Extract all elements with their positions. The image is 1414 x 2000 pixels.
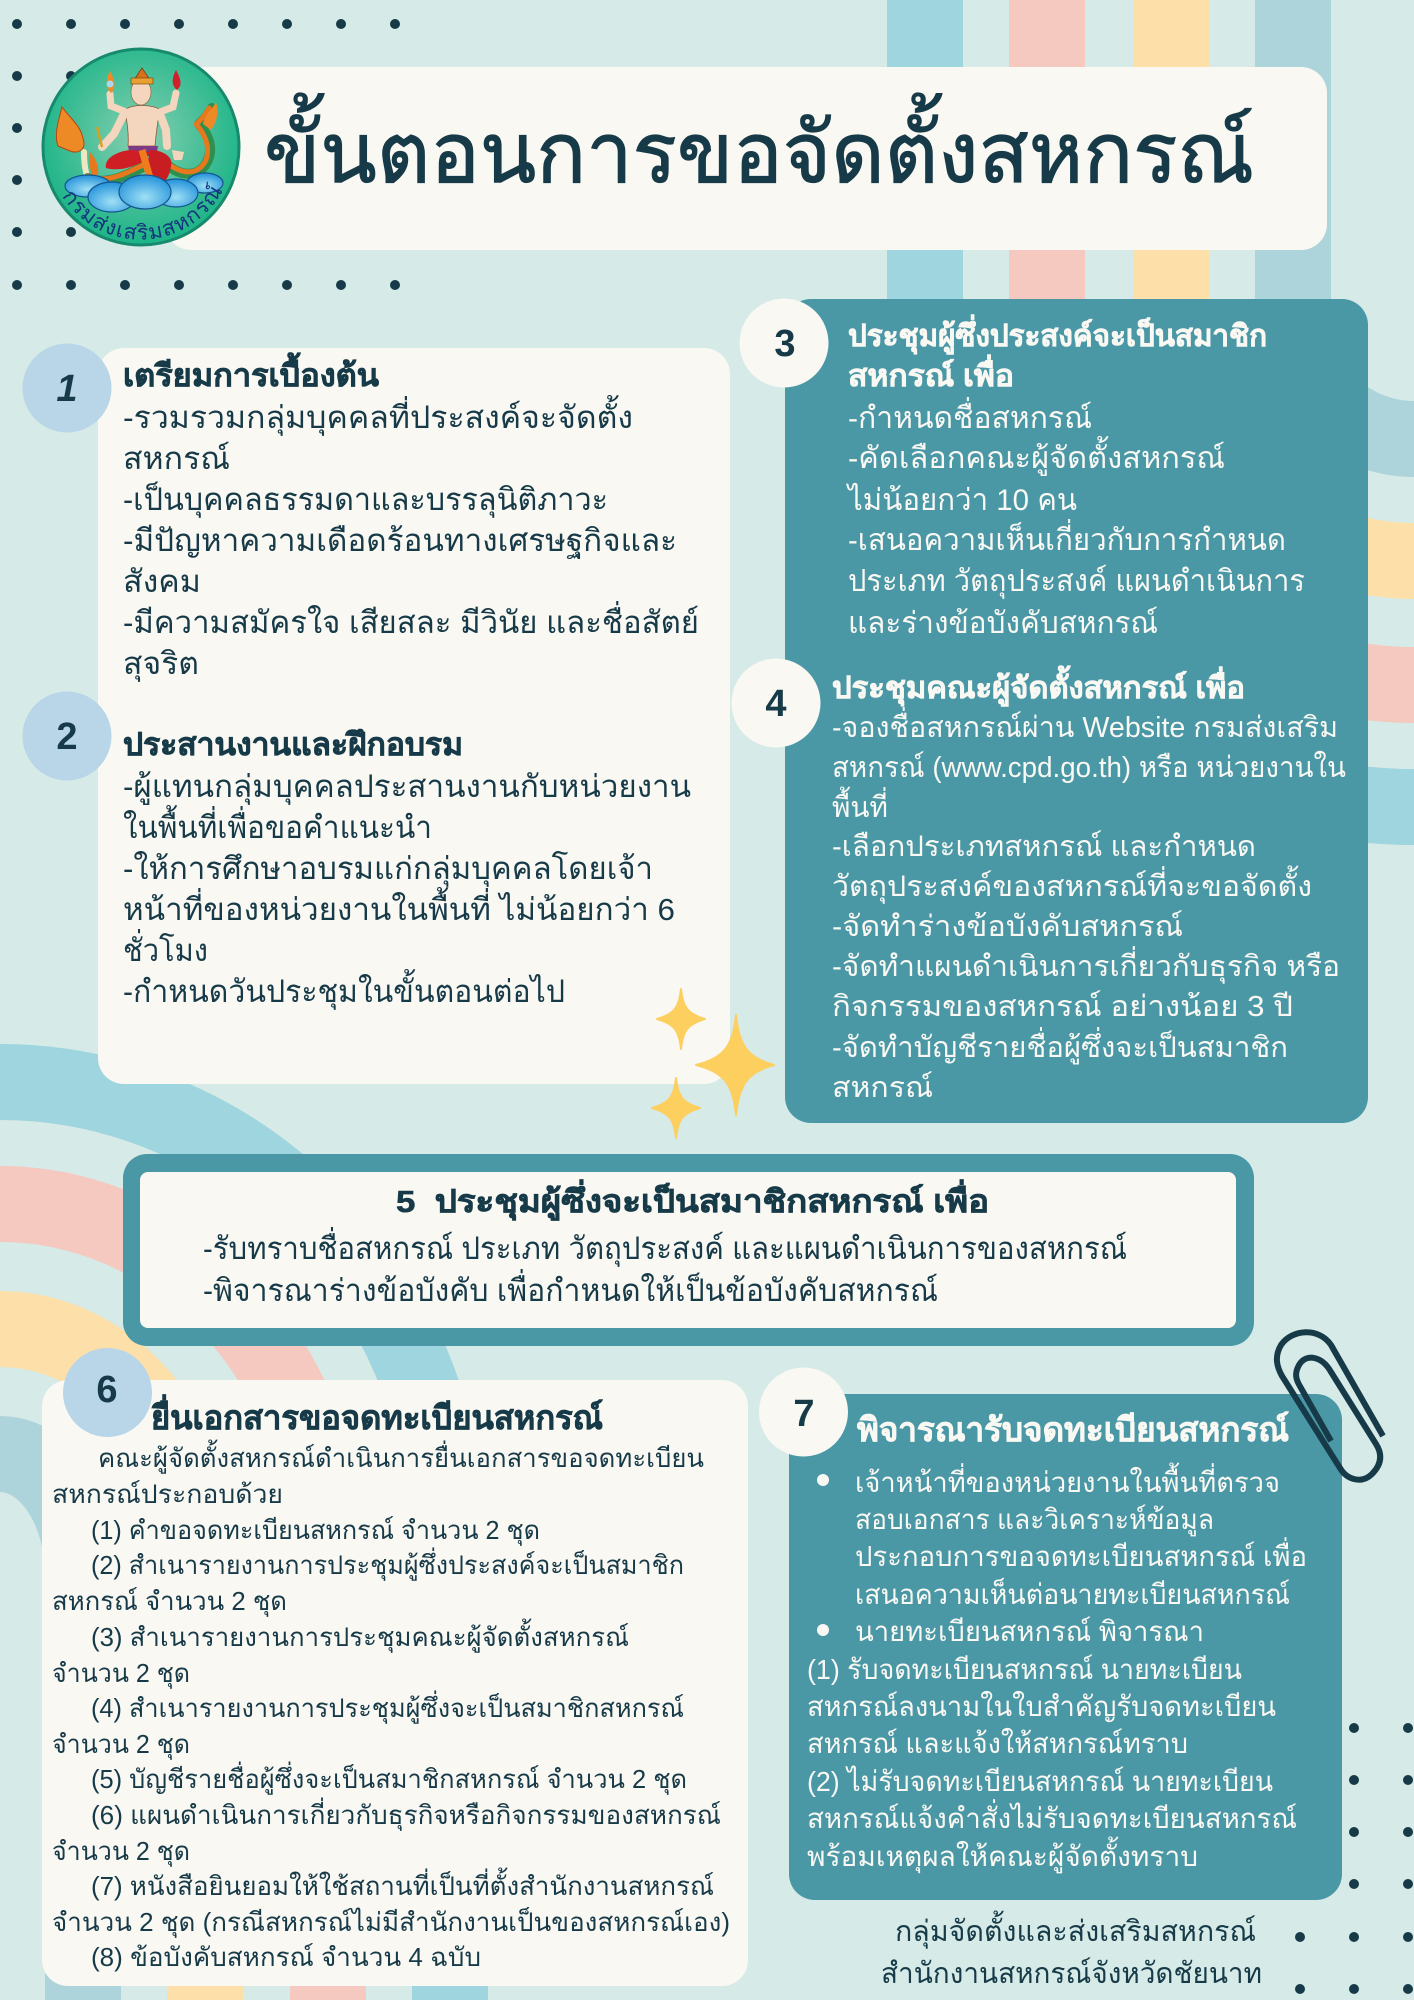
panel: steps 1 and 2 — [22, 344, 730, 1084]
naga serpent — [84, 108, 212, 184]
step 6 body: (6) แผนดำเนินการเกี่ยวกับธุรกิจหรือกิจกรรมของสหกรณ์ — [91, 1797, 721, 1831]
step 2 body: -กำหนดวันประชุมในขั้นตอนต่อไป — [123, 969, 565, 1011]
step 3 heading — [848, 314, 1267, 393]
step 4 heading: ประชุมคณะผู้จัดตั้งสหกรณ์ เพื่อ — [832, 665, 1245, 707]
step 3 body: -คัดเลือกคณะผู้จัดตั้งสหกรณ์ — [848, 436, 1225, 476]
step 2 badge: 2 — [56, 716, 78, 758]
step 2 body: -ให้การศึกษาอบรมแก่กลุ่มบุคคลโดยเจ้า — [123, 851, 653, 888]
seal text: กรมส่งเสริมสหกรณ์ — [63, 181, 222, 240]
icon: paperclip — [1277, 1332, 1383, 1480]
step 3 body — [846, 397, 1305, 640]
step 3 heading: สหกรณ์ เพื่อ — [848, 354, 1014, 393]
step 6 body: จำนวน 2 ชุด — [52, 1836, 190, 1867]
rainbow arcs bottom left — [0, 1082, 450, 2000]
step 4 body: -เลือกประเภทสหกรณ์ และกำหนด — [832, 830, 1256, 863]
step 4 body: พื้นที่ — [832, 786, 888, 824]
bullets — [817, 1474, 829, 1636]
naga head — [56, 107, 84, 152]
step 6 body: จำนวน 2 ชุด (กรณีสหกรณ์ไม่มีสำนักงานเป็นของสหกรณ์เอง) — [52, 1906, 730, 1938]
step 6 body: (8) ข้อบังคับสหกรณ์ จำนวน 4 ฉบับ — [91, 1942, 481, 1972]
step 6 body: คณะผู้จัดตั้งสหกรณ์ดำเนินการยื่นเอกสารขอจดทะเบียน — [98, 1439, 704, 1474]
naga neck flame — [89, 152, 98, 180]
title banner — [165, 67, 1327, 250]
step 7 body: สหกรณ์แจ้งคำสั่งไม่รับจดทะเบียนสหกรณ์ — [807, 1799, 1297, 1834]
step 6 body — [52, 1439, 730, 1972]
step 2 body: -ผู้แทนกลุ่มบุคคลประสานงานกับหน่วยงาน — [123, 769, 691, 806]
dot grid top left — [12, 19, 400, 290]
step 1 badge: 1 — [56, 368, 78, 410]
step 3 body: -เสนอความเห็นเกี่ยวกับการกำหนด — [848, 519, 1286, 557]
step 1 body: -เป็นบุคคลธรรมดาและบรรลุนิติภาวะ — [123, 481, 608, 519]
step 6 heading: ยื่นเอกสารขอจดทะเบียนสหกรณ์ — [151, 1394, 603, 1436]
step 7 body: (2) ไม่รับจดทะเบียนสหกรณ์ นายทะเบียน — [807, 1766, 1273, 1797]
step 4 badge: 4 — [765, 683, 787, 725]
step 1 body: -มีความสมัครใจ เสียสละ มีวินัย และชื่อสัตย์ — [123, 601, 699, 640]
step 4 body: กิจกรรมของสหกรณ์ อย่างน้อย 3 ปี — [832, 990, 1293, 1023]
panel: step 6 — [42, 1348, 748, 1986]
step 3 heading: ประชุมผู้ซึ่งประสงค์จะเป็นสมาชิก — [848, 314, 1267, 355]
deity figure — [97, 68, 184, 184]
step 7 badge — [759, 1368, 848, 1456]
step 7 heading: พิจารณารับจดทะเบียนสหกรณ์ — [857, 1411, 1289, 1448]
step 1 body: -มีปัญหาความเดือดร้อนทางเศรษฐกิจและ — [123, 523, 677, 559]
step 7 body: ประกอบการขอจดทะเบียนสหกรณ์ เพื่อ — [855, 1537, 1307, 1572]
step 3 body: -กำหนดชื่อสหกรณ์ — [848, 397, 1092, 435]
step 7 body — [807, 1462, 1307, 1874]
step 6 badge: 6 — [96, 1369, 118, 1411]
step 1 body: -รวมรวมกลุ่มบุคคลที่ประสงค์จะจัดตั้ง — [123, 395, 633, 437]
step 5 body: -พิจารณาร่างข้อบังคับ เพื่อกำหนดให้เป็นข้อบังคับสหกรณ์ — [203, 1269, 938, 1308]
step 2 body — [123, 769, 691, 1011]
step 1 body — [123, 395, 699, 683]
step 4 body: วัตถุประสงค์ของสหกรณ์ที่จะขอจัดตั้ง — [832, 865, 1312, 904]
step 7 body: สหกรณ์ลงนามในใบสำคัญรับจดทะเบียน — [807, 1690, 1276, 1722]
step 6 body: (2) สำเนารายงานการประชุมผู้ซึ่งประสงค์จะเป็นสมาชิก — [91, 1547, 684, 1581]
panel: step 7 — [759, 1368, 1342, 1900]
step 6 body: (7) หนังสือยินยอมให้ใช้สถานที่เป็นที่ตั้งสำนักงานสหกรณ์ — [91, 1867, 714, 1901]
logo: cooperative promotion department seal — [42, 48, 240, 246]
step 2 body: ชั่วโมง — [123, 929, 208, 968]
step 6 body: (4) สำเนารายงานการประชุมผู้ซึ่งจะเป็นสมาชิกสหกรณ์ — [91, 1690, 684, 1724]
step 6 body: จำนวน 2 ชุด — [52, 1658, 190, 1689]
step 4 body: สหกรณ์ — [832, 1071, 933, 1104]
sparkles — [652, 989, 774, 1138]
step 2 heading: ประสานงานและฝึกอบรม — [123, 727, 463, 762]
step 4 body: -จัดทำแผนดำเนินการเกี่ยวกับธุรกิจ หรือ — [832, 946, 1340, 984]
panel: steps 3 and 4 — [732, 298, 1368, 1123]
footer credit: กลุ่มจัดตั้งและส่งเสริมสหกรณ์ — [895, 1910, 1256, 1949]
step 4 body — [832, 707, 1346, 1104]
step 6 body: สหกรณ์ประกอบด้วย — [52, 1479, 283, 1509]
tail tip — [203, 102, 217, 130]
step 7 body: (1) รับจดทะเบียนสหกรณ์ นายทะเบียน — [807, 1654, 1242, 1685]
step 2 badge — [22, 692, 112, 780]
footer credit: สำนักงานสหกรณ์จังหวัดชัยนาท — [881, 1957, 1262, 1990]
step 6 body: สหกรณ์ จำนวน 2 ชุด — [52, 1586, 287, 1617]
step 3 body: ประเภท วัตถุประสงค์ แผนดำเนินการ — [848, 564, 1305, 600]
step 2 body: ในพื้นที่เพื่อขอคำแนะนำ — [123, 805, 432, 845]
step 1 body: สังคม — [123, 564, 201, 599]
step 6 body: จำนวน 2 ชุด — [52, 1729, 190, 1760]
step 2 body: หน้าที่ของหน่วยงานในพื้นที่ ไม่น้อยกว่า 6 — [123, 887, 675, 927]
step 5 body: -รับทราบชื่อสหกรณ์ ประเภท วัตถุประสงค์ และแผนดำเนินการของสหกรณ์ — [203, 1227, 1127, 1268]
step 6 body: (1) คำขอจดทะเบียนสหกรณ์ จำนวน 2 ชุด — [91, 1515, 540, 1546]
step 4 body: -จองชื่อสหกรณ์ผ่าน Website กรมส่งเสริม — [832, 707, 1338, 744]
step 6 badge — [63, 1348, 152, 1437]
step 1 badge — [22, 344, 112, 432]
step 3 body: และร่างข้อบังคับสหกรณ์ — [848, 606, 1158, 640]
step 6 body: (3) สำเนารายงานการประชุมคณะผู้จัดตั้งสหกรณ์ — [91, 1618, 629, 1653]
step 5 body — [203, 1227, 1127, 1308]
step 7 badge: 7 — [793, 1393, 815, 1435]
rainbow arcs top right — [925, 0, 1414, 807]
step 1 body: สหกรณ์ — [123, 441, 230, 476]
title: ขั้นตอนการขอจัดตั้งสหกรณ์ — [264, 93, 1254, 200]
step 4 body: สหกรณ์ (www.cpd.go.th) หรือ หน่วยงานใน — [832, 750, 1346, 784]
step 7 body: เจ้าหน้าที่ของหน่วยงานในพื้นที่ตรวจ — [855, 1462, 1280, 1498]
step 7 body: สหกรณ์ และแจ้งให้สหกรณ์ทราบ — [807, 1727, 1188, 1759]
step 7 body: นายทะเบียนสหกรณ์ พิจารณา — [855, 1616, 1204, 1647]
panel: step 5 — [123, 1154, 1254, 1346]
step 4 badge — [732, 658, 820, 748]
step 4 body: -จัดทำบัญชีรายชื่อผู้ซึ่งจะเป็นสมาชิก — [832, 1027, 1288, 1065]
step 7 body: สอบเอกสาร และวิเคราะห์ข้อมูล — [855, 1504, 1214, 1537]
step 7 body: พร้อมเหตุผลให้คณะผู้จัดตั้งทราบ — [807, 1836, 1198, 1874]
step 7 body: เสนอความเห็นต่อนายทะเบียนสหกรณ์ — [855, 1577, 1290, 1610]
clouds — [65, 173, 223, 212]
step 3 badge: 3 — [774, 323, 796, 365]
step 4 body: -จัดทำร่างข้อบังคับสหกรณ์ — [832, 910, 1183, 943]
step 1 body: สุจริต — [123, 646, 199, 683]
step 3 badge — [740, 298, 828, 388]
step 3 body: ไม่น้อยกว่า 10 คน — [846, 482, 1077, 517]
step 5 heading: 5 ประชุมผู้ซึ่งจะเป็นสมาชิกสหกรณ์ เพื่อ — [396, 1179, 989, 1221]
dot grid bottom right — [1295, 1723, 1413, 1994]
step 1 heading: เตรียมการเบื้องต้น — [123, 352, 379, 393]
footer credit — [881, 1910, 1262, 1990]
step 6 body: (5) บัญชีรายชื่อผู้ซึ่งจะเป็นสมาชิกสหกรณ์ จำนวน 2 ชุด — [91, 1761, 687, 1795]
